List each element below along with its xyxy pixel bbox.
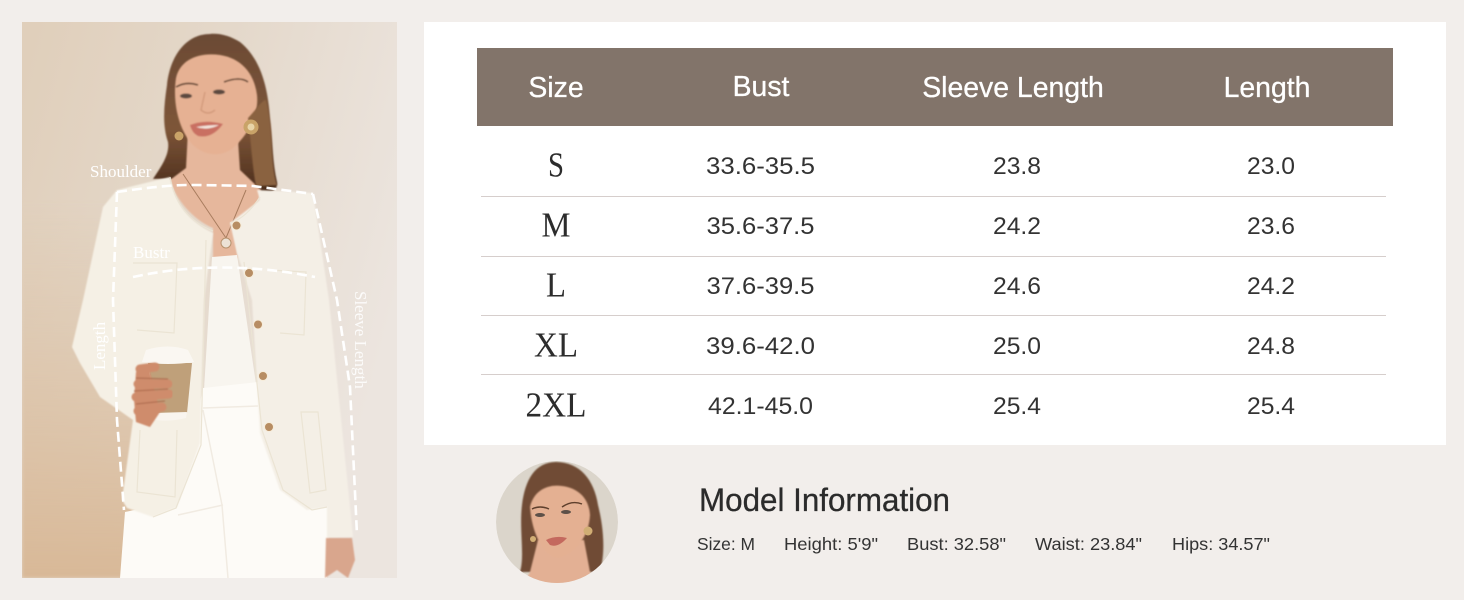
hair strand over right shoulder — [248, 100, 277, 186]
icon: model portrait — [496, 461, 618, 590]
model hair — [153, 34, 277, 193]
row: 2XL: 25.4 — [1247, 393, 1295, 420]
guide: bust line — [133, 268, 315, 277]
row: S — [548, 146, 1295, 184]
ribbed white top — [204, 255, 256, 390]
jacket left panel and sleeve — [72, 177, 213, 517]
label: Bust: Bustr — [133, 243, 170, 262]
row: M: 24.2 — [993, 213, 1041, 240]
jacket buttons — [232, 221, 274, 432]
guide: length line — [113, 192, 124, 510]
white trousers — [120, 382, 330, 578]
model face — [175, 54, 257, 154]
row: XL: 25.0 — [993, 333, 1041, 360]
row: XL — [534, 326, 1295, 364]
text block: model measurements: Height: 5'9" — [784, 534, 878, 554]
guide: shoulder line — [117, 185, 313, 194]
row: M: M — [542, 206, 570, 244]
row: XL: XL — [534, 326, 578, 364]
table header row: Sleeve Length — [922, 72, 1104, 104]
text block: model measurements — [697, 534, 1270, 554]
row: XL: 24.8 — [1247, 333, 1295, 360]
table header row — [477, 48, 1393, 126]
hand holding cup — [134, 367, 169, 427]
label: Shoulder: Shoulder — [90, 162, 152, 181]
row: 2XL: 25.4 — [993, 393, 1041, 420]
trouser crease shade — [178, 406, 258, 578]
table header row: Length — [1224, 72, 1310, 104]
row: S: 23.8 — [993, 153, 1041, 180]
row: L — [546, 266, 1295, 304]
photo wall backdrop — [22, 22, 397, 578]
row: L: 37.6-39.5 — [706, 273, 814, 300]
text block: model measurements: Hips: 34.57" — [1172, 534, 1270, 554]
text block: model measurements: Waist: 23.84" — [1035, 534, 1142, 554]
jacket seams and pockets — [133, 177, 327, 517]
jacket right panel and sleeve — [230, 190, 353, 538]
earrings — [174, 120, 258, 140]
row: 2XL — [526, 386, 1295, 424]
panel: model photo with measurement guides — [22, 22, 397, 578]
panel: size table — [424, 22, 1446, 445]
label: Sleeve Length: Sleeve Length — [351, 291, 370, 389]
row: S: 23.0 — [1247, 153, 1295, 180]
row: 2XL: 2XL — [526, 386, 586, 424]
coffee cup — [142, 346, 194, 421]
row: 2XL: 42.1-45.0 — [708, 393, 813, 420]
row: S: 33.6-35.5 — [706, 153, 815, 180]
table header row: Bust — [733, 71, 790, 103]
row: L: 24.2 — [1247, 273, 1295, 300]
row: XL: 39.6-42.0 — [706, 333, 815, 360]
table header row: Size — [528, 72, 584, 104]
row: M — [542, 206, 1295, 244]
guide: sleeve length line — [313, 194, 357, 535]
row: L: L — [546, 266, 566, 304]
necklace — [183, 174, 246, 248]
table white card — [424, 22, 1446, 445]
row: M: 23.6 — [1247, 213, 1295, 240]
label: Length: Length — [90, 321, 109, 370]
text block: model measurements: Size: M — [697, 534, 755, 554]
left hand at side — [325, 538, 355, 578]
text block: model measurements: Bust: 32.58" — [907, 534, 1006, 554]
model neck and chest — [170, 130, 261, 262]
row: S: S — [548, 146, 564, 184]
row: M: 35.6-37.5 — [706, 213, 814, 240]
heading: model information: Model Information — [699, 482, 950, 518]
row: L: 24.6 — [993, 273, 1041, 300]
